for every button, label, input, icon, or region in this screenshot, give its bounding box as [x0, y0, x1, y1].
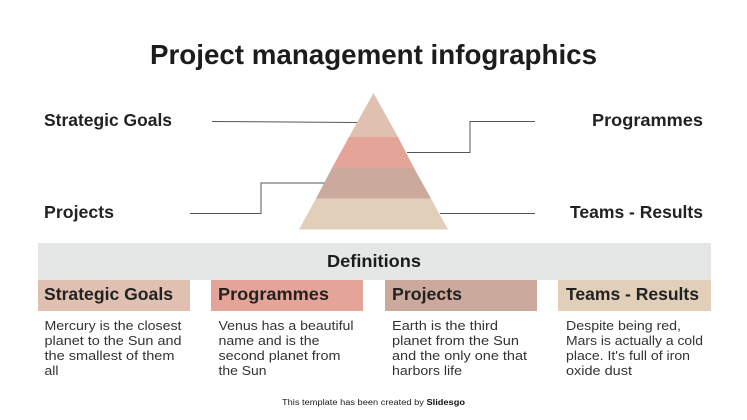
card: Teams - Results: Despite being red, [566, 318, 681, 333]
definitions banner: Definitions [327, 251, 421, 271]
card: Projects: harbors life [392, 363, 462, 378]
pyramid tier 3 [316, 168, 431, 198]
card: Programmes: Programmes [218, 284, 329, 304]
card: Strategic Goals: all [44, 363, 59, 378]
card: Teams - Results: Teams - Results [566, 284, 699, 304]
card: Programmes [211, 280, 363, 378]
card: Projects [385, 280, 537, 378]
connector: Projects [190, 183, 325, 214]
card: Programmes: name and is the [218, 333, 320, 348]
card: Teams - Results: oxide dust [566, 363, 632, 378]
card: Teams - Results: place. It's full of iron [566, 348, 690, 363]
card: Strategic Goals: the smallest of them [44, 348, 175, 363]
definitions banner [38, 243, 711, 280]
card: Projects: and the only one that [392, 348, 527, 363]
label: Programmes: Programmes [592, 110, 703, 130]
card: Programmes: the Sun [218, 363, 266, 378]
card: Strategic Goals: Strategic Goals [44, 284, 173, 304]
pyramid [299, 93, 448, 230]
card: Projects: planet from the Sun [392, 333, 519, 348]
pyramid tier 2 [332, 137, 414, 168]
connector: Strategic Goals [212, 122, 358, 123]
label: Projects: Projects [44, 202, 114, 222]
card: Strategic Goals [38, 280, 190, 378]
label: Strategic Goals: Strategic Goals [44, 110, 172, 130]
connector: Programmes [407, 122, 535, 152]
card: Programmes: Venus has a beautiful [218, 318, 354, 333]
footer credit: This template has been created by Slidesgo [282, 398, 465, 407]
card: Teams - Results: Mars is actually a cold [566, 333, 703, 348]
pyramid tier 4 [299, 198, 448, 230]
card: Strategic Goals: Mercury is the closest [44, 318, 182, 333]
title: Project management infographics [150, 39, 597, 70]
card: Projects: Projects [392, 284, 462, 304]
label: Teams - Results: Teams - Results [570, 202, 703, 222]
card: Strategic Goals: planet to the Sun and [44, 333, 182, 348]
pyramid tier 1 [349, 93, 398, 137]
card: Projects: Earth is the third [392, 318, 498, 333]
card: Programmes: second planet from [218, 348, 341, 363]
card: Teams - Results [558, 280, 711, 378]
connector: Teams - Results [440, 212, 535, 214]
